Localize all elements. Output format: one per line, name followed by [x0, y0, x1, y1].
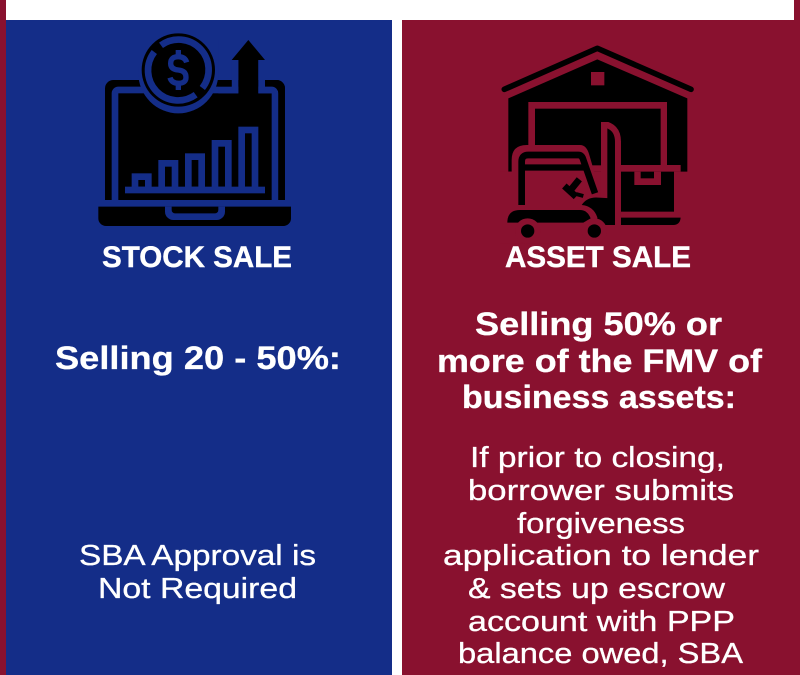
subheading: selling 50% or more: Selling 50% or	[475, 306, 722, 342]
text: SBA approval not required: Not Required	[98, 573, 297, 605]
subheading: selling 50% or more	[437, 306, 762, 415]
text: escrow condition: balance owed, SBA	[458, 638, 744, 670]
text: escrow condition: borrower submits	[468, 475, 734, 507]
text: escrow condition: If prior to closing,	[470, 442, 725, 474]
subheading: selling 50% or more: business assets:	[462, 379, 736, 415]
icon: warehouse with forklift	[500, 48, 691, 244]
text: SBA approval not required: SBA Approval is	[79, 540, 316, 572]
heading: asset sale: ASSET SALE	[505, 241, 691, 274]
text: escrow condition: & sets up escrow	[468, 573, 726, 605]
subheading: selling 50% or more: more of the FMV of	[437, 343, 762, 379]
subheading: selling 20-50%: Selling 20 - 50%:	[55, 340, 341, 376]
icon: laptop with growth chart and dollar coin	[98, 33, 291, 226]
text: SBA approval not required	[79, 540, 316, 605]
heading: stock sale: STOCK SALE	[102, 241, 292, 274]
text: escrow condition: account with PPP	[468, 606, 735, 638]
panel: asset sale	[402, 20, 800, 675]
text: escrow condition: application to lender	[443, 540, 759, 572]
text: escrow condition	[443, 442, 759, 670]
panel: stock sale	[6, 20, 392, 675]
text: escrow condition: forgiveness	[517, 508, 685, 540]
